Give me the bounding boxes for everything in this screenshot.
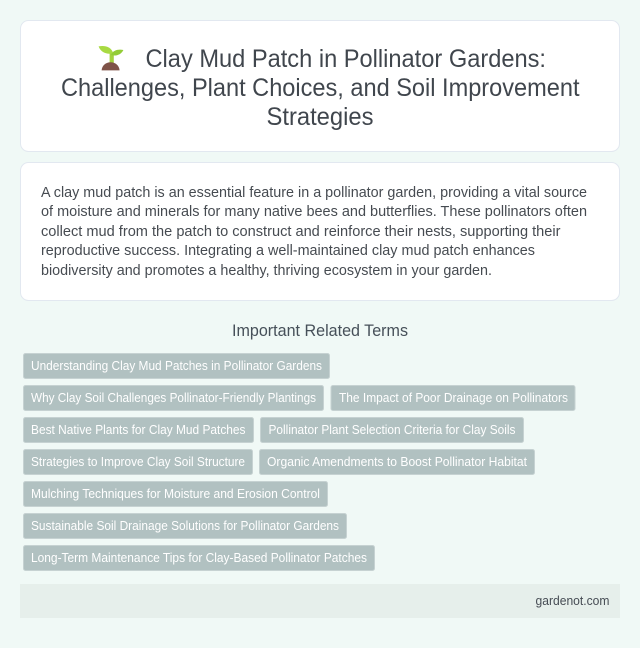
- panel: title card: [20, 20, 620, 152]
- tag: best native plants: Best Native Plants for Clay Mud Patches: [31, 422, 246, 437]
- description paragraph: A clay mud patch is an essential feature in a pollinator garden, providing a vital source: [41, 184, 587, 201]
- tag: long-term maintenance: Long-Term Maintenance Tips for Clay-Based Pollinator Patches: [31, 550, 367, 565]
- heading: important related terms: Important Related Terms: [232, 322, 408, 340]
- tag: why clay soil challenges: [24, 386, 324, 410]
- panel: title card: Strategies: [266, 103, 374, 131]
- tag: why clay soil challenges: Why Clay Soil Challenges Pollinator-Friendly Plantings: [31, 390, 316, 405]
- tag: long-term maintenance: [24, 546, 374, 570]
- tag: understanding clay mud patches: Understanding Clay Mud Patches in Pollinator Gardens: [31, 358, 322, 373]
- panel: related term tags: [24, 354, 575, 570]
- tag: impact of poor drainage: [331, 386, 575, 410]
- panel: description card: [20, 162, 620, 300]
- tag: organic amendments: Organic Amendments to Boost Pollinator Habitat: [267, 454, 527, 469]
- footer bar: [20, 584, 620, 618]
- description paragraph: biodiversity and promotes a healthy, thriving ecosystem in your garden.: [41, 262, 492, 279]
- tag: understanding clay mud patches: [24, 354, 330, 378]
- description paragraph: of moisture and minerals for many native bees and butterflies. These pollinators often: [41, 203, 587, 220]
- tag: mulching techniques: Mulching Techniques for Moisture and Erosion Control: [31, 486, 320, 501]
- tag: mulching techniques: [24, 482, 328, 506]
- title text: Clay Mud Patch in Pollinator Gardens:: [146, 45, 546, 73]
- panel: title card: Challenges, Plant Choices, and Soil Improvement: [61, 74, 580, 102]
- description paragraph: reproductive success. Integrating a well-maintained clay mud patch enhances: [41, 242, 535, 259]
- tag: strategies to improve: [24, 450, 252, 474]
- tag: organic amendments: [260, 450, 534, 474]
- tag: pollinator plant selection: [260, 418, 524, 442]
- tag: sustainable soil drainage: Sustainable Soil Drainage Solutions for Pollinator Gardens: [31, 518, 339, 533]
- description paragraph: [41, 184, 587, 279]
- icon: seedling: [99, 46, 123, 70]
- description paragraph: collect mud from the patch to construct and reinforce their nests, supporting their: [41, 223, 561, 240]
- tag: best native plants: [24, 418, 254, 442]
- tag: sustainable soil drainage: [24, 514, 346, 538]
- tag: strategies to improve: Strategies to Improve Clay Soil Structure: [31, 454, 245, 469]
- footer site name: gardenot.com: [536, 593, 610, 608]
- tag: impact of poor drainage: The Impact of Poor Drainage on Pollinators: [339, 390, 568, 405]
- tag: pollinator plant selection: Pollinator Plant Selection Criteria for Clay Soils: [268, 422, 516, 437]
